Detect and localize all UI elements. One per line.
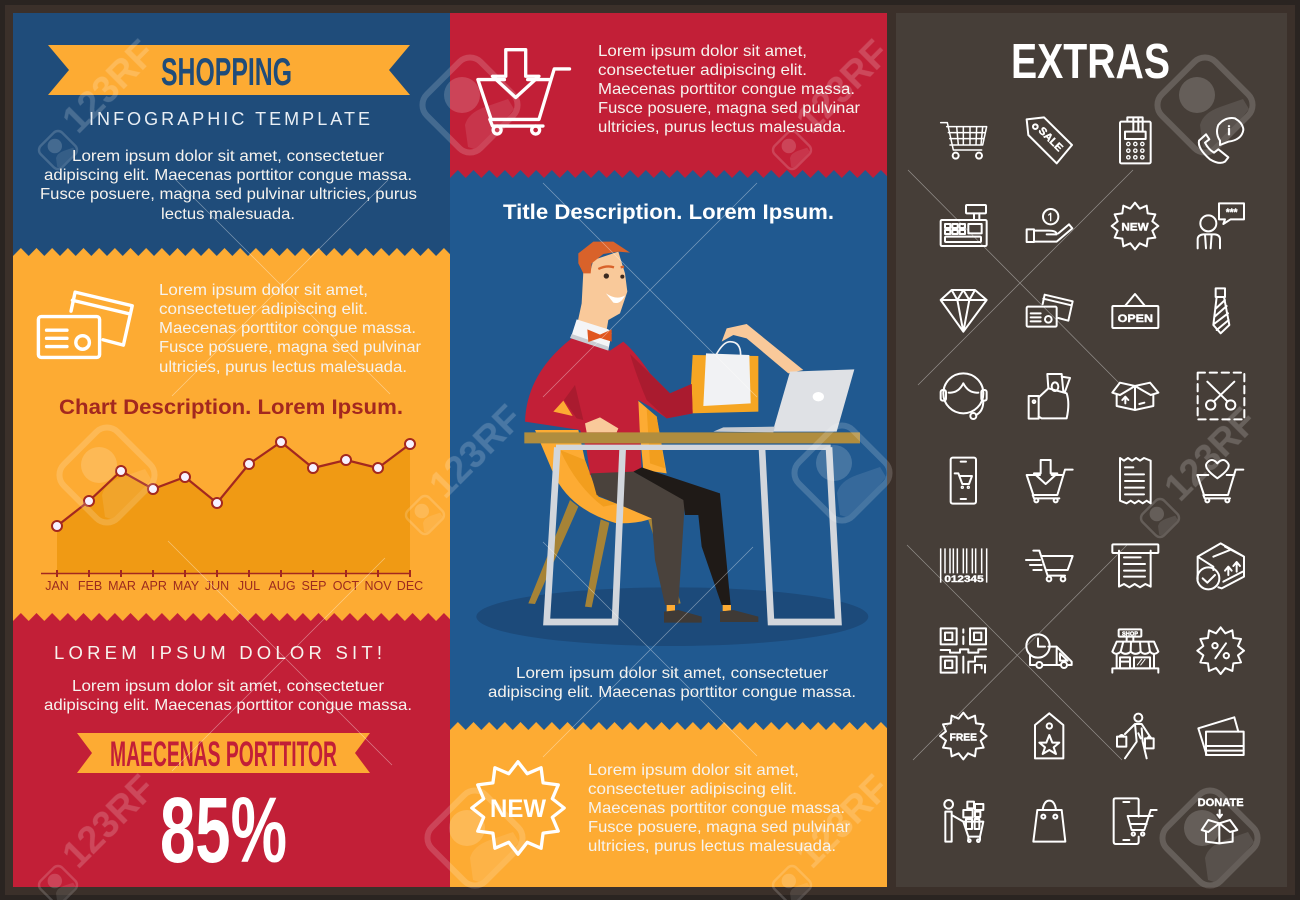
icon: phone with cart <box>951 458 976 504</box>
icon: receipt printer <box>1112 544 1158 587</box>
icon: new badge: NEW <box>490 795 546 823</box>
icon: shopping cart <box>941 123 987 159</box>
ribbon label: MAECENAS PORTTITOR <box>110 735 337 774</box>
new badge text: Fusce posuere, magna sed pulvinar <box>588 819 851 836</box>
icon: hand with money <box>1029 374 1070 419</box>
area chart: MAR <box>108 579 136 593</box>
stat text <box>44 678 412 714</box>
icon: qr code <box>941 628 986 673</box>
icon: cart with arrow <box>478 50 570 134</box>
card text: Maecenas porttitor congue massa. <box>159 320 416 337</box>
new badge text: Maecenas porttitor congue massa. <box>588 800 845 817</box>
chart title: Chart Description. Lorem Ipsum. <box>59 396 403 419</box>
watermarks: 123RF <box>422 397 531 506</box>
new badge text: consectetuer adipiscing elit. <box>588 781 797 798</box>
icon: box check <box>1197 543 1244 589</box>
icon: new burst: NEW <box>1121 221 1150 233</box>
stat text: Lorem ipsum dolor sit amet, consectetuer <box>72 678 385 695</box>
icon: percent burst <box>1197 627 1244 674</box>
icon: person with full cart <box>944 800 983 842</box>
title ribbon <box>48 45 410 95</box>
icon: cash register <box>941 205 987 246</box>
illustration text <box>488 665 856 701</box>
icon: delivery truck with clock <box>1026 634 1072 668</box>
area chart <box>41 437 423 593</box>
intro text: lectus malesuada. <box>161 206 295 223</box>
card text: Lorem ipsum dolor sit amet, <box>159 282 368 299</box>
card text <box>159 282 422 376</box>
subtitle: INFOGRAPHIC TEMPLATE <box>89 109 370 129</box>
area chart: FEB <box>78 579 102 593</box>
icon: phone with info bubble <box>1199 118 1243 163</box>
stat ribbon <box>77 733 370 773</box>
illustration text: adipiscing elit. Maecenas porttitor congue massa. <box>488 684 856 701</box>
new badge text <box>588 762 851 855</box>
icon: sale tag: SALE <box>1036 125 1065 154</box>
stat text: adipiscing elit. Maecenas porttitor congue massa. <box>44 697 412 714</box>
title: SHOPPING <box>161 51 292 94</box>
area chart: JUN <box>205 579 229 593</box>
illustration text: Lorem ipsum dolor sit amet, consectetuer <box>516 665 829 682</box>
intro text <box>40 148 417 223</box>
panel: extras <box>896 13 1287 887</box>
icon: shop: SHOP <box>1122 631 1138 637</box>
panel: new badge <box>450 722 887 887</box>
cart text: Maecenas porttitor congue massa. <box>598 81 855 98</box>
icon: open sign <box>1112 294 1158 328</box>
cart text: Fusce posuere, magna sed pulvinar <box>598 100 861 117</box>
icon: open box <box>1112 383 1158 410</box>
icon: person with speech bubble: *** <box>1226 208 1238 219</box>
icon: free burst: FREE <box>950 732 977 743</box>
icon: payment cards <box>1027 295 1073 327</box>
icon: mobile shop <box>1114 798 1157 844</box>
icon: card terminal <box>1120 117 1151 163</box>
icon: support headset <box>941 373 987 419</box>
icon: new badge <box>472 762 564 854</box>
area chart: JUL <box>238 579 260 593</box>
icons rows 4-6 <box>941 373 1244 589</box>
icon: barcode <box>941 548 987 584</box>
extras heading: EXTRAS <box>1011 35 1170 89</box>
illustration: man shopping online <box>476 242 868 646</box>
icon: free burst <box>940 713 987 759</box>
intro text: Lorem ipsum dolor sit amet, consectetuer <box>72 148 385 165</box>
icon: star tag <box>1035 713 1063 758</box>
area chart: SEP <box>301 579 327 593</box>
watermarks: 123RF <box>789 32 898 141</box>
new badge text: Lorem ipsum dolor sit amet, <box>588 762 799 779</box>
card text: ultricies, purus lectus malesuada. <box>159 359 407 376</box>
area chart: DEC <box>397 579 423 593</box>
watermarks: 123RF <box>55 767 164 876</box>
icon: hand with coin <box>1027 209 1072 242</box>
icon: coupon scissors <box>1198 373 1244 419</box>
cart text: ultricies, purus lectus malesuada. <box>598 119 846 136</box>
illustration heading: Title Description. Lorem Ipsum. <box>503 201 834 224</box>
watermarks: 123RF <box>1157 400 1266 509</box>
icon: shopping bag <box>1033 801 1065 842</box>
panel: percent stat <box>13 613 450 887</box>
icon: cards stack <box>1198 717 1244 755</box>
icon: receipt <box>1120 458 1151 503</box>
icon: fast cart <box>1026 551 1073 581</box>
intro text: Fusce posuere, magna sed pulvinar ultricies, purus <box>40 186 417 203</box>
panel: cart text <box>450 13 887 178</box>
panel: chart <box>13 248 450 621</box>
new badge text: ultricies, purus lectus malesuada. <box>588 838 836 855</box>
icon: credit cards <box>38 292 132 357</box>
cart text: Lorem ipsum dolor sit amet, <box>598 43 807 60</box>
card text: Fusce posuere, magna sed pulvinar <box>159 339 422 356</box>
area chart: NOV <box>364 579 392 593</box>
icon: add to cart <box>1027 460 1073 502</box>
icon: shop <box>1112 629 1158 673</box>
icons rows 1-3 <box>941 117 1244 333</box>
watermarks: 123RF <box>789 767 898 876</box>
panel: illustration <box>450 170 887 730</box>
area chart: APR <box>141 579 167 593</box>
cart text <box>598 43 861 136</box>
icon: wishlist cart <box>1197 460 1243 502</box>
intro text: adipiscing elit. Maecenas porttitor congue massa. <box>44 167 412 184</box>
icon: sale tag <box>1027 117 1072 163</box>
area chart: JAN <box>45 579 69 593</box>
area chart: MAY <box>173 579 200 593</box>
watermarks: 123RF <box>55 32 164 141</box>
cart text: consectetuer adipiscing elit. <box>598 62 807 79</box>
icon: donate box <box>1198 797 1244 843</box>
area chart: OCT <box>333 579 360 593</box>
icon: open sign: OPEN <box>1118 313 1153 325</box>
area chart: AUG <box>268 579 296 593</box>
icon: person with speech bubble <box>1198 203 1244 248</box>
icon: diamond <box>941 290 987 332</box>
percent value: 85% <box>160 778 287 882</box>
icon: barcode: 012345 <box>944 574 984 584</box>
icon: phone with info bubble: i <box>1227 124 1231 138</box>
icons rows 7-9 <box>940 627 1244 844</box>
icon: donate box: DONATE <box>1198 797 1244 809</box>
icon: necktie <box>1213 288 1229 333</box>
card text: consectetuer adipiscing elit. <box>159 301 368 318</box>
icon: new burst <box>1112 203 1158 249</box>
panel: shopping title <box>13 13 450 256</box>
stat heading: LOREM IPSUM DOLOR SIT! <box>54 642 382 663</box>
icon: shopper walking <box>1117 714 1154 758</box>
